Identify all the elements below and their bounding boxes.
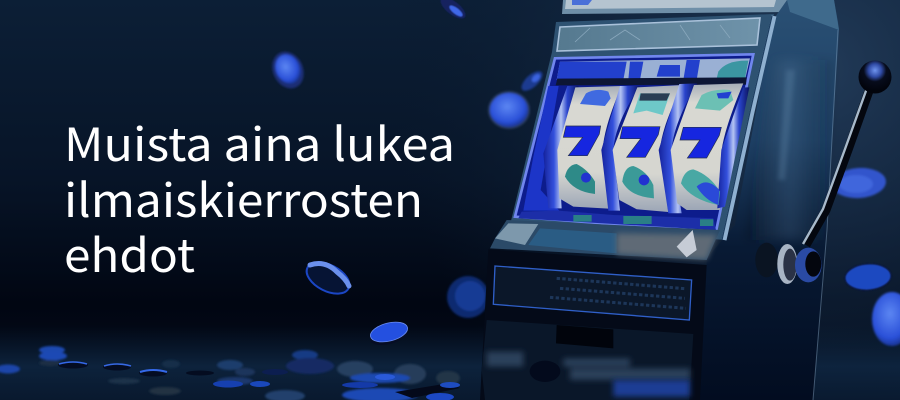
machine: sign panel [557, 18, 760, 51]
falling coin: right of lever [831, 166, 887, 200]
window bottom tray [518, 211, 716, 230]
falling coin: upper left blurred [266, 46, 310, 94]
falling coin: top edge [437, 0, 469, 22]
title: ilmaiskierrosten [64, 165, 423, 231]
reel 2 [613, 85, 683, 212]
falling coin: beside machine [488, 68, 546, 129]
machine: chrome trim [722, 16, 774, 240]
slot machine [480, 0, 892, 400]
machine: side panel [695, 0, 839, 400]
upper panel with blue outline [493, 266, 692, 320]
chrome band between reels 1-2 [601, 86, 640, 211]
machine: coin tray [490, 220, 720, 260]
left chrome band [523, 86, 559, 211]
machine: lever [755, 60, 892, 284]
title [64, 109, 455, 286]
title: Muista aina lukea [64, 109, 455, 175]
machine: lower front [480, 249, 707, 400]
machine: window [515, 54, 753, 232]
chrome band between reels 2-3 [659, 83, 697, 213]
window frame [515, 54, 753, 232]
window top reflection [557, 58, 750, 80]
title: ehdot [64, 220, 195, 286]
top symbols [580, 90, 733, 115]
falling coin: center tilted [302, 256, 354, 300]
machine: front head [510, 14, 774, 240]
reel 1 [557, 86, 622, 209]
falling coin: right lower [872, 292, 900, 346]
seven 2 [620, 127, 660, 157]
floor coins [0, 346, 460, 400]
reel 3 [671, 83, 743, 210]
bottom symbols [565, 164, 720, 205]
seven 3 [680, 127, 721, 158]
falling coin: dark blurred [447, 276, 489, 318]
right chrome band [717, 87, 749, 208]
seven 1 [563, 126, 601, 156]
machine: top cap [562, 0, 787, 14]
falling coin: center flat [368, 319, 410, 348]
lever ball [858, 60, 892, 94]
lower panel [482, 320, 693, 400]
falling coin: right middle [844, 262, 892, 292]
